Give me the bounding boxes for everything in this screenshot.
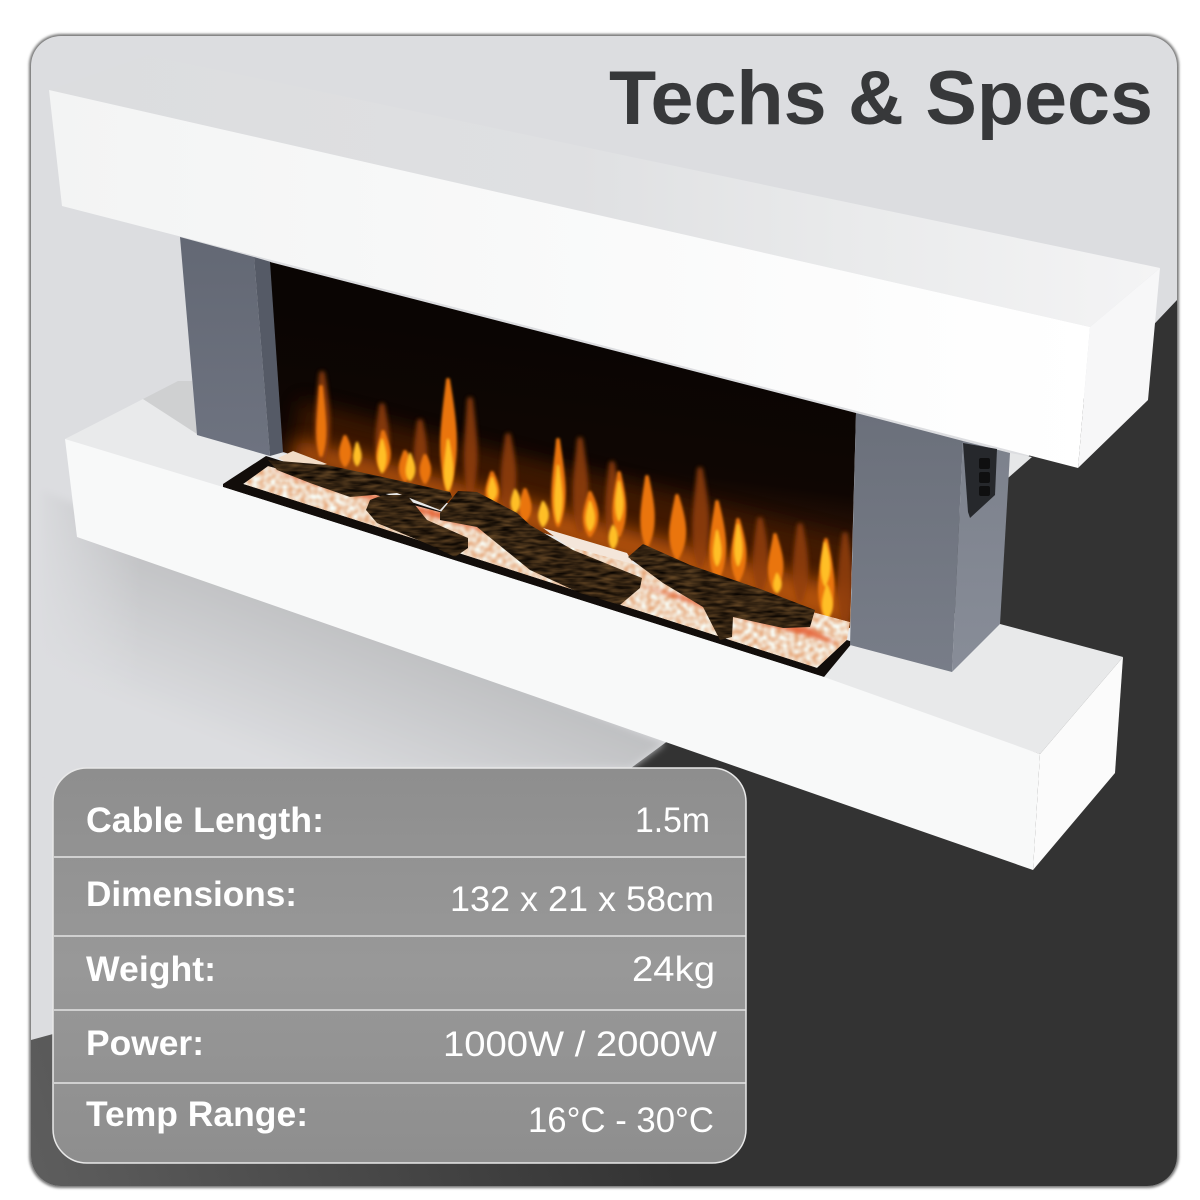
row: weight: 24kg [632, 950, 715, 989]
specs panel [53, 768, 746, 1163]
row: cable length: Cable Length: [86, 801, 324, 840]
left pillar [180, 237, 284, 456]
row: cable length [86, 801, 710, 840]
row: dimensions: Dimensions: [86, 875, 297, 914]
ember tray [223, 456, 853, 677]
row: power: 1000W / 2000W [443, 1025, 717, 1064]
row: dimensions: 132 x 21 x 58cm [450, 880, 714, 919]
flames [290, 374, 850, 630]
top mantel [49, 55, 1160, 468]
right pillar [850, 413, 1010, 672]
wall shadow [40, 490, 665, 768]
bottom shelf front [65, 439, 1123, 870]
row: weight [86, 950, 715, 989]
row: temp range: 16°C - 30°C [528, 1101, 714, 1140]
log right [628, 544, 815, 640]
row: dimensions [86, 875, 714, 919]
shadow fade at left [38, 490, 104, 620]
logs [268, 460, 815, 640]
row dividers [54, 857, 746, 1083]
row: power [86, 1024, 717, 1064]
shelf top face [65, 399, 1123, 754]
pillar shadow on shelf [143, 381, 197, 434]
dark floor [31, 300, 1177, 1186]
row: weight: Weight: [86, 950, 216, 989]
orange flames [318, 380, 833, 618]
ember glow [268, 468, 840, 645]
row: temp range: Temp Range: [86, 1095, 308, 1134]
fireplace unit [49, 55, 1160, 870]
row: temp range [86, 1095, 714, 1140]
dim streak flames [318, 374, 849, 620]
glow haze [290, 440, 850, 630]
log rear left [268, 460, 452, 510]
yellow flames [354, 440, 832, 618]
row: cable length: 1.5m [635, 801, 710, 840]
log small front [366, 495, 468, 557]
wall patch behind right pillar [1005, 452, 1032, 478]
wide dim haze [290, 400, 850, 630]
fire chamber [270, 262, 856, 630]
title: Techs & Specs [609, 56, 1153, 141]
control switch box [963, 443, 997, 518]
row: power: Power: [86, 1024, 204, 1063]
log centre [440, 491, 642, 605]
back pebbles [278, 451, 640, 575]
